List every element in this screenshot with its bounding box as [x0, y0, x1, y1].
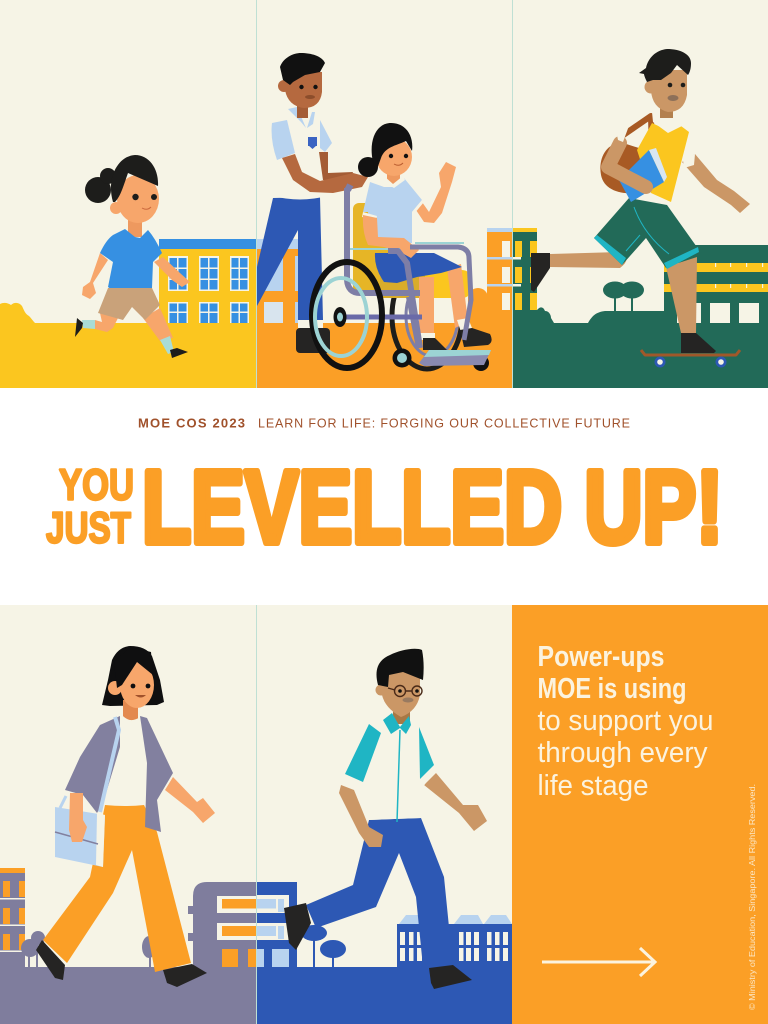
- panel: orange call to action: [512, 605, 768, 1024]
- subtitle: LEARN FOR LIFE: FORGING OUR COLLECTIVE FUTURE: [258, 416, 630, 430]
- panel: secondary students scene: [256, 0, 512, 388]
- arrow: [542, 948, 655, 976]
- heading text: life stage: [538, 770, 648, 802]
- heading text: Power-ups: [538, 641, 664, 673]
- boy on skateboard: [531, 49, 750, 353]
- grey tower building: [0, 868, 25, 968]
- orange school buildings: [256, 228, 512, 324]
- panel: adult man scene: [256, 605, 512, 1024]
- blue building with light windows: [256, 882, 297, 968]
- panel: child scene: [0, 0, 256, 388]
- title: JUST: [46, 504, 131, 552]
- subtitle: MOE COS 2023: [138, 416, 245, 430]
- blue trees: [301, 925, 346, 968]
- title: YOU: [59, 460, 134, 510]
- yellow school building: [159, 239, 256, 324]
- orange ground: [256, 323, 512, 388]
- panel: adult woman scene: [0, 605, 256, 1024]
- green tower building: [513, 228, 537, 324]
- grey trees: [21, 931, 156, 968]
- heading text: MOE is using: [538, 673, 686, 705]
- wheelchair rear parts: [353, 203, 472, 369]
- grey building with orange windows: [188, 882, 256, 968]
- trees: [603, 282, 644, 313]
- skateboard: [641, 350, 740, 368]
- heading text: through every: [538, 737, 708, 769]
- green college building: [664, 245, 768, 324]
- woman walking: [36, 646, 215, 987]
- boy in white shirt pushing wheelchair: [257, 53, 368, 353]
- blue ground: [256, 967, 512, 1024]
- grey ground: [0, 967, 256, 1024]
- yellow ground and bush: [0, 303, 256, 388]
- wheelchair front frame and wheels: [312, 186, 491, 371]
- girl running: [75, 155, 190, 358]
- green ground, bush and hill: [513, 307, 768, 388]
- panel: white title band: [46, 416, 723, 564]
- copyright: © Ministry of Education, Singapore. All Rights Reserved.: [748, 784, 757, 1010]
- heading text: to support you: [538, 705, 714, 737]
- blue block with roofs: [397, 915, 512, 968]
- man walking: [284, 649, 487, 989]
- panel: post-secondary scene: [512, 0, 768, 388]
- girl in wheelchair: [358, 123, 492, 350]
- heading text: [538, 641, 714, 802]
